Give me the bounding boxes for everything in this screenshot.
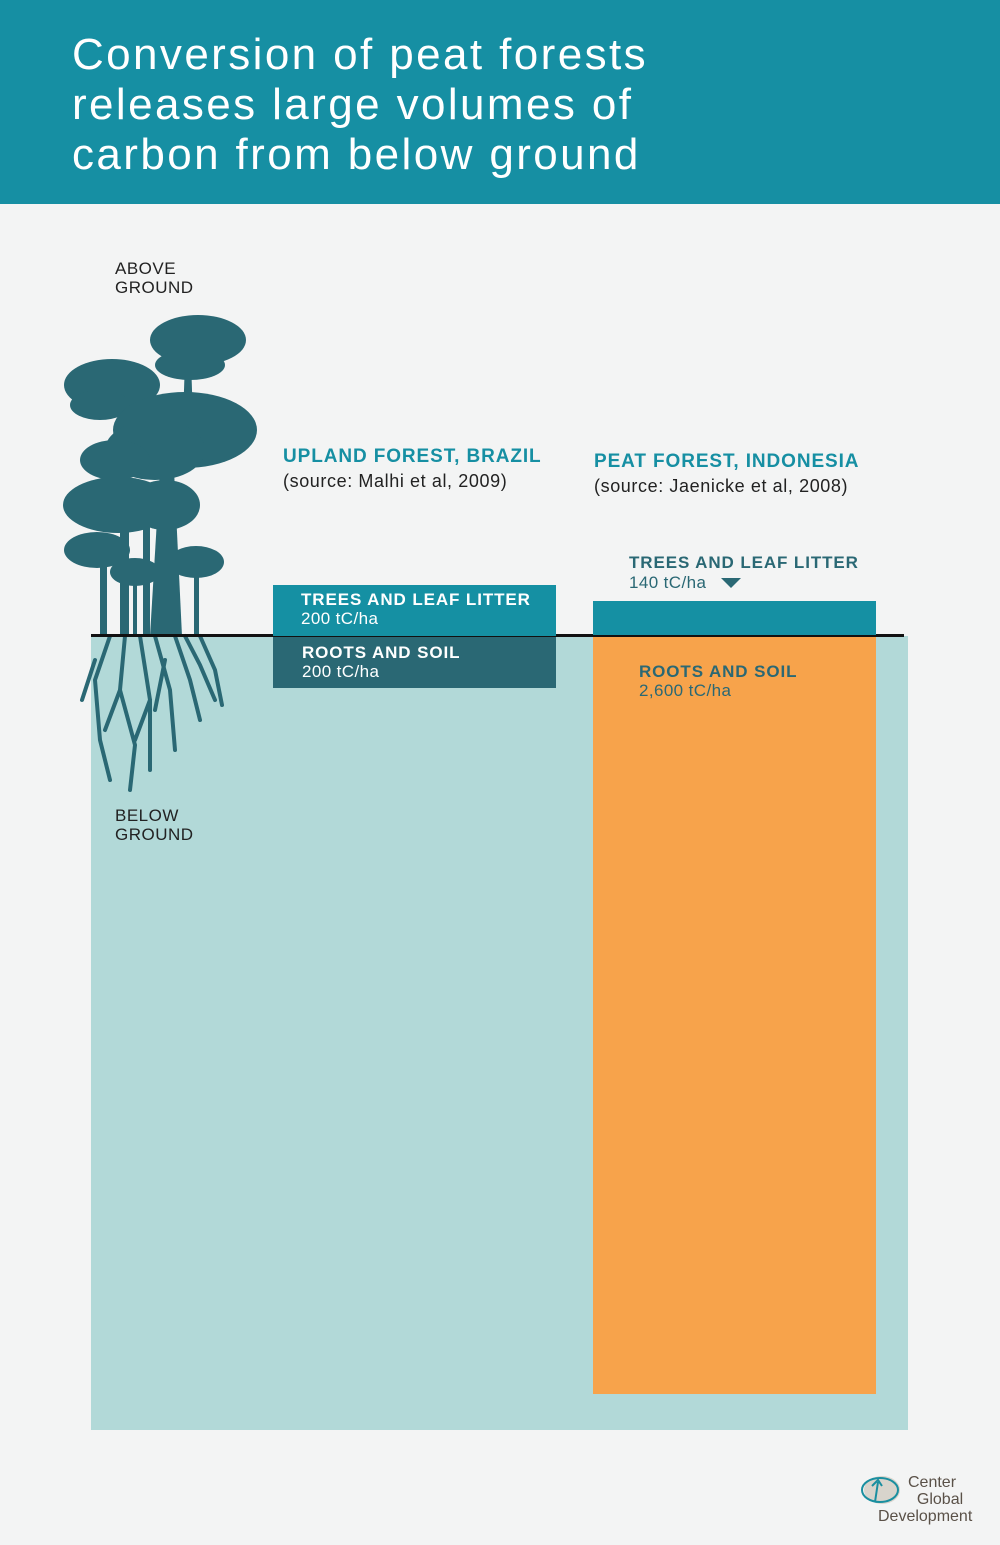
below ground area [91,636,908,1430]
bar: peat roots: 2,600 tC/ha [639,681,731,700]
label: above ground: GROUND [115,278,194,297]
bar: upland trees: 200 tC/ha [301,609,378,628]
title: Conversion of peat forests [72,30,648,79]
bar: upland trees [273,585,556,636]
ground line [91,634,904,637]
heading: peat forest: PEAT FOREST, INDONESIA [594,451,859,472]
bar: upland trees: TREES AND LEAF LITTER [301,590,531,609]
logo: Development [878,1508,972,1525]
label: peat trees: 140 tC/ha [629,573,706,592]
label: above ground: ABOVE [115,259,176,278]
logo [861,1474,972,1525]
icon: tree with roots [63,315,257,792]
bar: upland roots: ROOTS AND SOIL [302,643,460,662]
label: below ground: GROUND [115,825,194,844]
title: releases large volumes of [72,80,633,129]
title [72,30,648,179]
label: peat trees [629,553,859,592]
bar: upland roots: 200 tC/ha [302,662,379,681]
heading: upland forest: UPLAND FOREST, BRAZIL [283,446,542,467]
heading: peat forest [594,451,859,496]
bar: peat trees [593,601,876,635]
title: carbon from below ground [72,130,641,179]
label: peat trees: TREES AND LEAF LITTER [629,553,859,572]
header banner [0,0,1000,204]
logo: Global [917,1491,963,1508]
heading: peat forest: (source: Jaenicke et al, 2008) [594,476,848,496]
label: above ground [115,259,194,297]
heading: upland forest: (source: Malhi et al, 2009) [283,471,507,491]
bar: peat roots [593,637,876,1394]
logo: Center [908,1474,956,1491]
bar: peat roots: ROOTS AND SOIL [639,662,797,681]
heading: upland forest [283,446,542,491]
label: below ground [115,806,194,844]
bar: upland roots [273,637,556,688]
label: below ground: BELOW [115,806,179,825]
